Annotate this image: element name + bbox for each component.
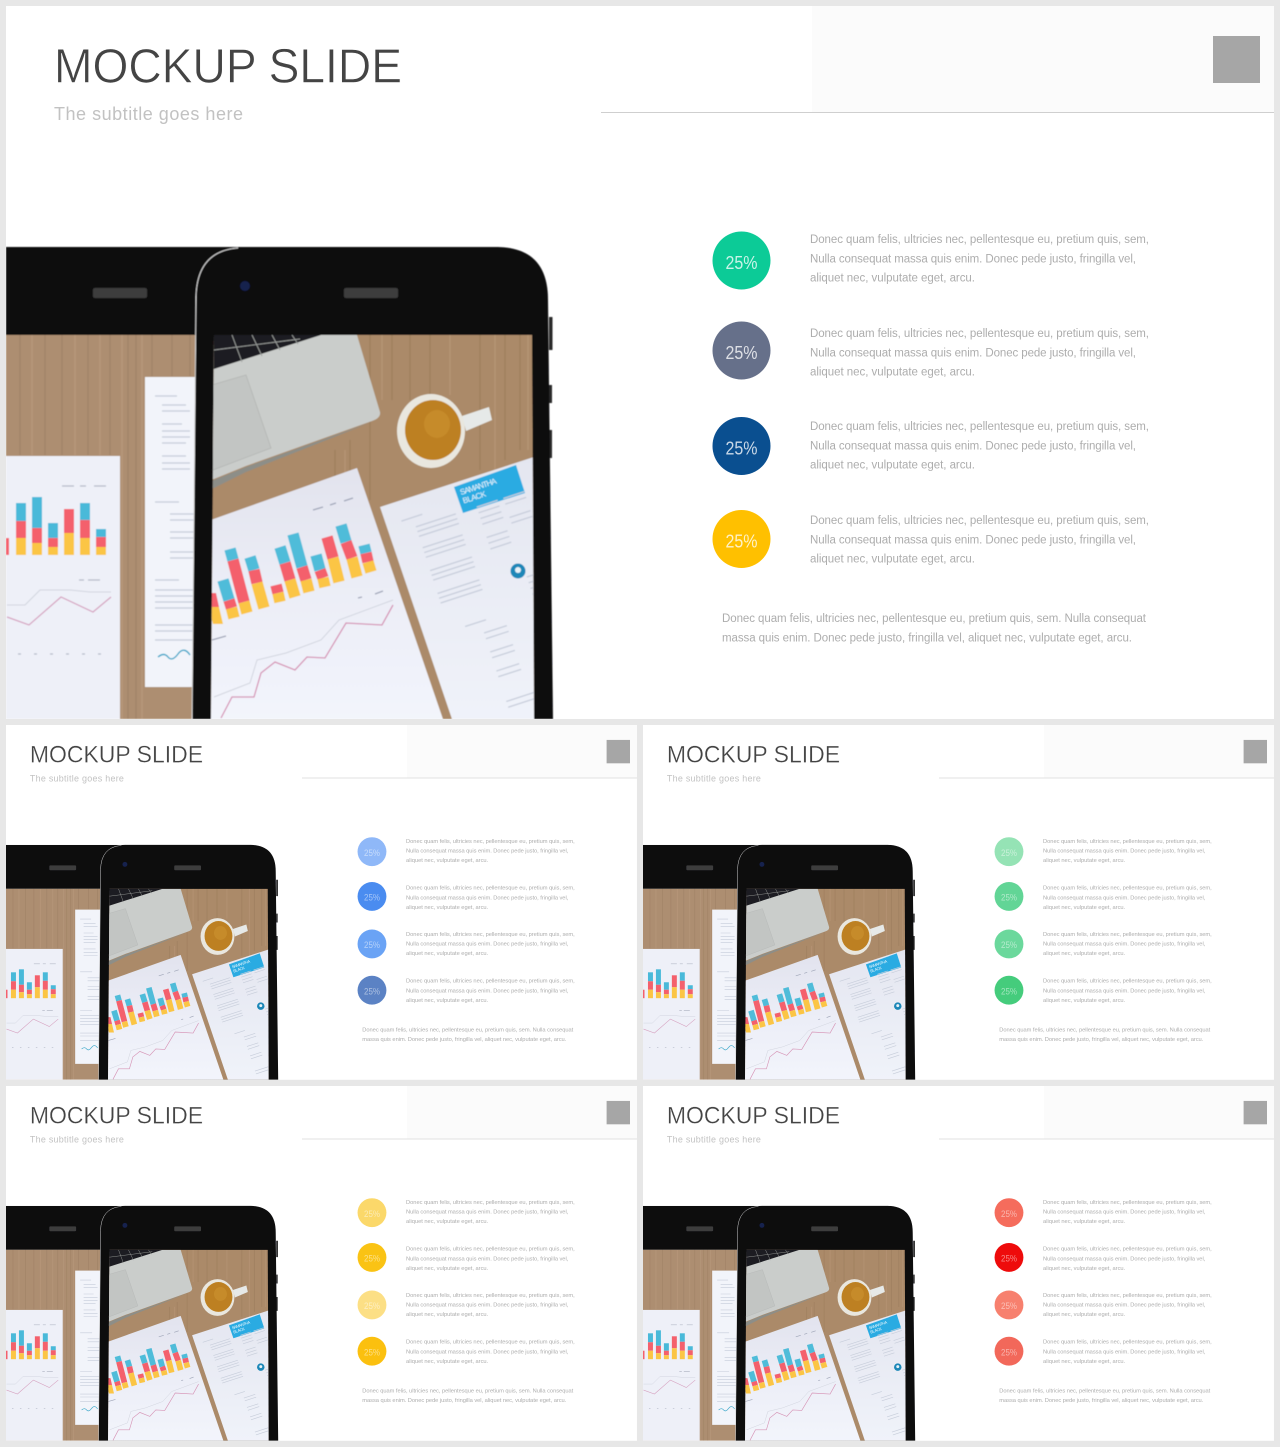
item 4 badge: 25% <box>1001 986 1017 996</box>
item 1 badge: 25% <box>364 848 380 858</box>
item 4 badge <box>358 976 386 1005</box>
item 2 badge <box>358 1243 386 1272</box>
item 3 text: Donec quam felis, ultricies nec, pellentesque eu, pretium quis, sem, <box>810 421 1149 433</box>
item 1 badge: 25% <box>726 253 758 273</box>
closing paragraph: massa quis enim. Donec pede justo, fringilla vel, aliquet nec, vulputate eget, arcu. <box>722 632 1132 644</box>
item 1 text <box>406 839 575 864</box>
item 4 text: aliquet nec, vulputate eget, arcu. <box>810 554 975 566</box>
phone mockup image <box>6 1206 302 1444</box>
item 3 text: Nulla consequat massa quis enim. Donec pede justo, fringilla vel, <box>406 942 569 948</box>
item 1 text: Donec quam felis, ultricies nec, pellentesque eu, pretium quis, sem, <box>1043 839 1212 845</box>
subtitle: The subtitle goes here <box>30 774 124 784</box>
item 1 badge <box>712 232 770 290</box>
item 1 text: Nulla consequat massa quis enim. Donec pede justo, fringilla vel, <box>406 849 569 855</box>
closing paragraph <box>999 1028 1211 1043</box>
item 3 text <box>1043 1293 1212 1318</box>
item 3 text <box>406 1293 575 1318</box>
item 3 badge <box>358 930 386 958</box>
item 4 text <box>406 979 575 1004</box>
item 2 text: Donec quam felis, ultricies nec, pellentesque eu, pretium quis, sem, <box>1043 886 1212 892</box>
item 4 text: Nulla consequat massa quis enim. Donec pede justo, fringilla vel, <box>406 1349 569 1355</box>
icon: gray square <box>607 740 630 763</box>
closing paragraph: Donec quam felis, ultricies nec, pellentesque eu, pretium quis, sem. Nulla consequat <box>722 613 1147 625</box>
item 1 text: aliquet nec, vulputate eget, arcu. <box>810 272 975 284</box>
subtitle: The subtitle goes here <box>54 104 243 124</box>
item 1 badge: 25% <box>1001 848 1017 858</box>
item 4 text: Donec quam felis, ultricies nec, pellentesque eu, pretium quis, sem, <box>1043 1340 1212 1346</box>
item 2 badge: 25% <box>364 1254 380 1264</box>
item 4 text <box>1043 1340 1212 1365</box>
item 2 text: Donec quam felis, ultricies nec, pellentesque eu, pretium quis, sem, <box>1043 1247 1212 1253</box>
item 1 text: Donec quam felis, ultricies nec, pellentesque eu, pretium quis, sem, <box>1043 1200 1212 1206</box>
item 3 badge: 25% <box>364 1301 380 1311</box>
item 3 text: Nulla consequat massa quis enim. Donec pede justo, fringilla vel, <box>1043 942 1206 948</box>
subtitle: The subtitle goes here <box>667 774 761 784</box>
item 2 badge <box>712 322 770 380</box>
item 1 badge <box>995 1198 1023 1227</box>
item 3 badge <box>712 417 770 475</box>
item 4 text: Donec quam felis, ultricies nec, pellentesque eu, pretium quis, sem, <box>406 979 575 985</box>
item 3 badge: 25% <box>726 438 758 458</box>
item 4 text: Nulla consequat massa quis enim. Donec pede justo, fringilla vel, <box>1043 988 1206 994</box>
item 3 text <box>406 932 575 957</box>
icon: gray square <box>607 1101 630 1124</box>
closing paragraph <box>722 613 1147 644</box>
item 1 badge <box>995 837 1023 866</box>
item 4 text <box>406 1340 575 1365</box>
item 4 text: aliquet nec, vulputate eget, arcu. <box>1043 998 1126 1004</box>
item 3 text: aliquet nec, vulputate eget, arcu. <box>406 1312 489 1318</box>
closing paragraph: massa quis enim. Donec pede justo, fringilla vel, aliquet nec, vulputate eget, arcu. <box>362 1037 567 1043</box>
closing paragraph: Donec quam felis, ultricies nec, pellentesque eu, pretium quis, sem. Nulla consequat <box>362 1028 574 1034</box>
item 4 text: Nulla consequat massa quis enim. Donec pede justo, fringilla vel, <box>810 534 1136 546</box>
item 2 text: aliquet nec, vulputate eget, arcu. <box>1043 905 1126 911</box>
item 1 text: Donec quam felis, ultricies nec, pellentesque eu, pretium quis, sem, <box>810 234 1149 246</box>
item 4 badge <box>712 510 770 568</box>
item 4 text <box>1043 979 1212 1004</box>
title: MOCKUP SLIDE <box>667 741 840 768</box>
item 1 badge: 25% <box>1001 1209 1017 1219</box>
item 2 text <box>1043 1247 1212 1272</box>
phone mockup image <box>643 845 939 1083</box>
item 4 text: aliquet nec, vulputate eget, arcu. <box>1043 1359 1126 1365</box>
closing paragraph: Donec quam felis, ultricies nec, pellentesque eu, pretium quis, sem. Nulla consequat <box>999 1389 1211 1395</box>
item 3 text: Nulla consequat massa quis enim. Donec pede justo, fringilla vel, <box>810 440 1136 452</box>
item 1 text: Nulla consequat massa quis enim. Donec pede justo, fringilla vel, <box>406 1210 569 1216</box>
closing paragraph <box>362 1028 574 1043</box>
panel: blue slide <box>6 725 637 1083</box>
item 3 badge <box>358 1291 386 1319</box>
item 3 badge <box>995 930 1023 958</box>
panel: yellow slide <box>6 1086 637 1444</box>
item 3 text <box>1043 932 1212 957</box>
item 2 text: Donec quam felis, ultricies nec, pellentesque eu, pretium quis, sem, <box>406 886 575 892</box>
item 1 text: Donec quam felis, ultricies nec, pellentesque eu, pretium quis, sem, <box>406 839 575 845</box>
item 3 text <box>810 421 1149 472</box>
title: MOCKUP SLIDE <box>667 1102 840 1129</box>
item 3 badge: 25% <box>364 940 380 950</box>
item 4 text: Nulla consequat massa quis enim. Donec pede justo, fringilla vel, <box>1043 1349 1206 1355</box>
item 1 text <box>1043 839 1212 864</box>
item 4 badge <box>358 1337 386 1366</box>
item 2 text <box>1043 886 1212 911</box>
phone mockup image <box>6 845 302 1083</box>
phone mockup image <box>6 247 601 725</box>
closing paragraph: Donec quam felis, ultricies nec, pellentesque eu, pretium quis, sem. Nulla consequat <box>362 1389 574 1395</box>
item 2 text: Nulla consequat massa quis enim. Donec pede justo, fringilla vel, <box>406 895 569 901</box>
item 2 text: Nulla consequat massa quis enim. Donec pede justo, fringilla vel, <box>810 348 1136 360</box>
item 2 text: Nulla consequat massa quis enim. Donec pede justo, fringilla vel, <box>1043 1256 1206 1262</box>
item 1 text: aliquet nec, vulputate eget, arcu. <box>406 858 489 864</box>
item 3 badge <box>995 1291 1023 1319</box>
item 4 badge: 25% <box>364 1347 380 1357</box>
icon: gray square <box>1213 36 1260 83</box>
item 3 text: Donec quam felis, ultricies nec, pellentesque eu, pretium quis, sem, <box>1043 932 1212 938</box>
item 4 text: Donec quam felis, ultricies nec, pellentesque eu, pretium quis, sem, <box>810 515 1149 527</box>
closing paragraph <box>362 1389 574 1404</box>
item 4 badge: 25% <box>364 986 380 996</box>
item 1 text <box>1043 1200 1212 1225</box>
item 3 text: Nulla consequat massa quis enim. Donec pede justo, fringilla vel, <box>406 1303 569 1309</box>
item 4 badge <box>995 1337 1023 1366</box>
subtitle: The subtitle goes here <box>667 1135 761 1145</box>
item 2 badge: 25% <box>1001 1254 1017 1264</box>
item 1 text <box>810 234 1149 284</box>
item 4 text <box>810 515 1149 566</box>
item 2 text <box>406 1247 575 1272</box>
item 4 text: Donec quam felis, ultricies nec, pellentesque eu, pretium quis, sem, <box>406 1340 575 1346</box>
title: MOCKUP SLIDE <box>30 741 203 768</box>
item 2 badge: 25% <box>1001 893 1017 903</box>
item 4 badge: 25% <box>726 532 758 552</box>
closing paragraph: massa quis enim. Donec pede justo, fringilla vel, aliquet nec, vulputate eget, arcu. <box>362 1398 567 1404</box>
item 4 badge: 25% <box>1001 1347 1017 1357</box>
item 4 text: aliquet nec, vulputate eget, arcu. <box>406 998 489 1004</box>
panel: main slide <box>6 6 1274 725</box>
item 1 text: Nulla consequat massa quis enim. Donec pede justo, fringilla vel, <box>1043 849 1206 855</box>
closing paragraph: massa quis enim. Donec pede justo, fringilla vel, aliquet nec, vulputate eget, arcu. <box>999 1037 1204 1043</box>
item 1 text: Nulla consequat massa quis enim. Donec pede justo, fringilla vel, <box>810 254 1136 266</box>
phone mockup image <box>643 1206 939 1444</box>
item 3 text: Donec quam felis, ultricies nec, pellentesque eu, pretium quis, sem, <box>406 1293 575 1299</box>
title: MOCKUP SLIDE <box>54 40 402 94</box>
panel: red slide <box>643 1086 1274 1444</box>
item 3 text: aliquet nec, vulputate eget, arcu. <box>1043 1312 1126 1318</box>
item 3 text: aliquet nec, vulputate eget, arcu. <box>406 951 489 957</box>
item 1 text: aliquet nec, vulputate eget, arcu. <box>406 1219 489 1225</box>
item 1 text: aliquet nec, vulputate eget, arcu. <box>1043 1219 1126 1225</box>
icon: gray square <box>1244 1101 1267 1124</box>
item 4 badge <box>995 976 1023 1005</box>
item 1 text: aliquet nec, vulputate eget, arcu. <box>1043 858 1126 864</box>
item 3 text: aliquet nec, vulputate eget, arcu. <box>810 460 975 472</box>
item 3 text: Nulla consequat massa quis enim. Donec pede justo, fringilla vel, <box>1043 1303 1206 1309</box>
item 1 badge <box>358 1198 386 1227</box>
closing paragraph <box>999 1389 1211 1404</box>
item 1 text: Donec quam felis, ultricies nec, pellentesque eu, pretium quis, sem, <box>406 1200 575 1206</box>
item 2 badge <box>995 1243 1023 1272</box>
item 2 text: Donec quam felis, ultricies nec, pellentesque eu, pretium quis, sem, <box>810 328 1149 340</box>
item 2 badge <box>358 882 386 911</box>
item 2 text: aliquet nec, vulputate eget, arcu. <box>810 366 975 378</box>
item 1 text <box>406 1200 575 1225</box>
item 2 badge: 25% <box>364 893 380 903</box>
item 2 text: Nulla consequat massa quis enim. Donec pede justo, fringilla vel, <box>406 1256 569 1262</box>
item 3 badge: 25% <box>1001 940 1017 950</box>
item 2 text: Donec quam felis, ultricies nec, pellentesque eu, pretium quis, sem, <box>406 1247 575 1253</box>
icon: gray square <box>1244 740 1267 763</box>
item 3 text: aliquet nec, vulputate eget, arcu. <box>1043 951 1126 957</box>
item 1 badge: 25% <box>364 1209 380 1219</box>
item 2 text <box>810 328 1149 378</box>
subtitle: The subtitle goes here <box>30 1135 124 1145</box>
item 4 text: Nulla consequat massa quis enim. Donec pede justo, fringilla vel, <box>406 988 569 994</box>
item 2 text: aliquet nec, vulputate eget, arcu. <box>406 1266 489 1272</box>
item 3 badge: 25% <box>1001 1301 1017 1311</box>
item 3 text: Donec quam felis, ultricies nec, pellentesque eu, pretium quis, sem, <box>1043 1293 1212 1299</box>
closing paragraph: Donec quam felis, ultricies nec, pellentesque eu, pretium quis, sem. Nulla consequat <box>999 1028 1211 1034</box>
item 2 text <box>406 886 575 911</box>
closing paragraph: massa quis enim. Donec pede justo, fringilla vel, aliquet nec, vulputate eget, arcu. <box>999 1398 1204 1404</box>
item 3 text: Donec quam felis, ultricies nec, pellentesque eu, pretium quis, sem, <box>406 932 575 938</box>
item 1 badge <box>358 837 386 866</box>
panel: green slide <box>643 725 1274 1083</box>
title: MOCKUP SLIDE <box>30 1102 203 1129</box>
item 2 text: aliquet nec, vulputate eget, arcu. <box>406 905 489 911</box>
item 4 text: Donec quam felis, ultricies nec, pellentesque eu, pretium quis, sem, <box>1043 979 1212 985</box>
item 2 text: Nulla consequat massa quis enim. Donec pede justo, fringilla vel, <box>1043 895 1206 901</box>
item 2 badge <box>995 882 1023 911</box>
item 1 text: Nulla consequat massa quis enim. Donec pede justo, fringilla vel, <box>1043 1210 1206 1216</box>
item 4 text: aliquet nec, vulputate eget, arcu. <box>406 1359 489 1365</box>
item 2 badge: 25% <box>726 343 758 363</box>
item 2 text: aliquet nec, vulputate eget, arcu. <box>1043 1266 1126 1272</box>
